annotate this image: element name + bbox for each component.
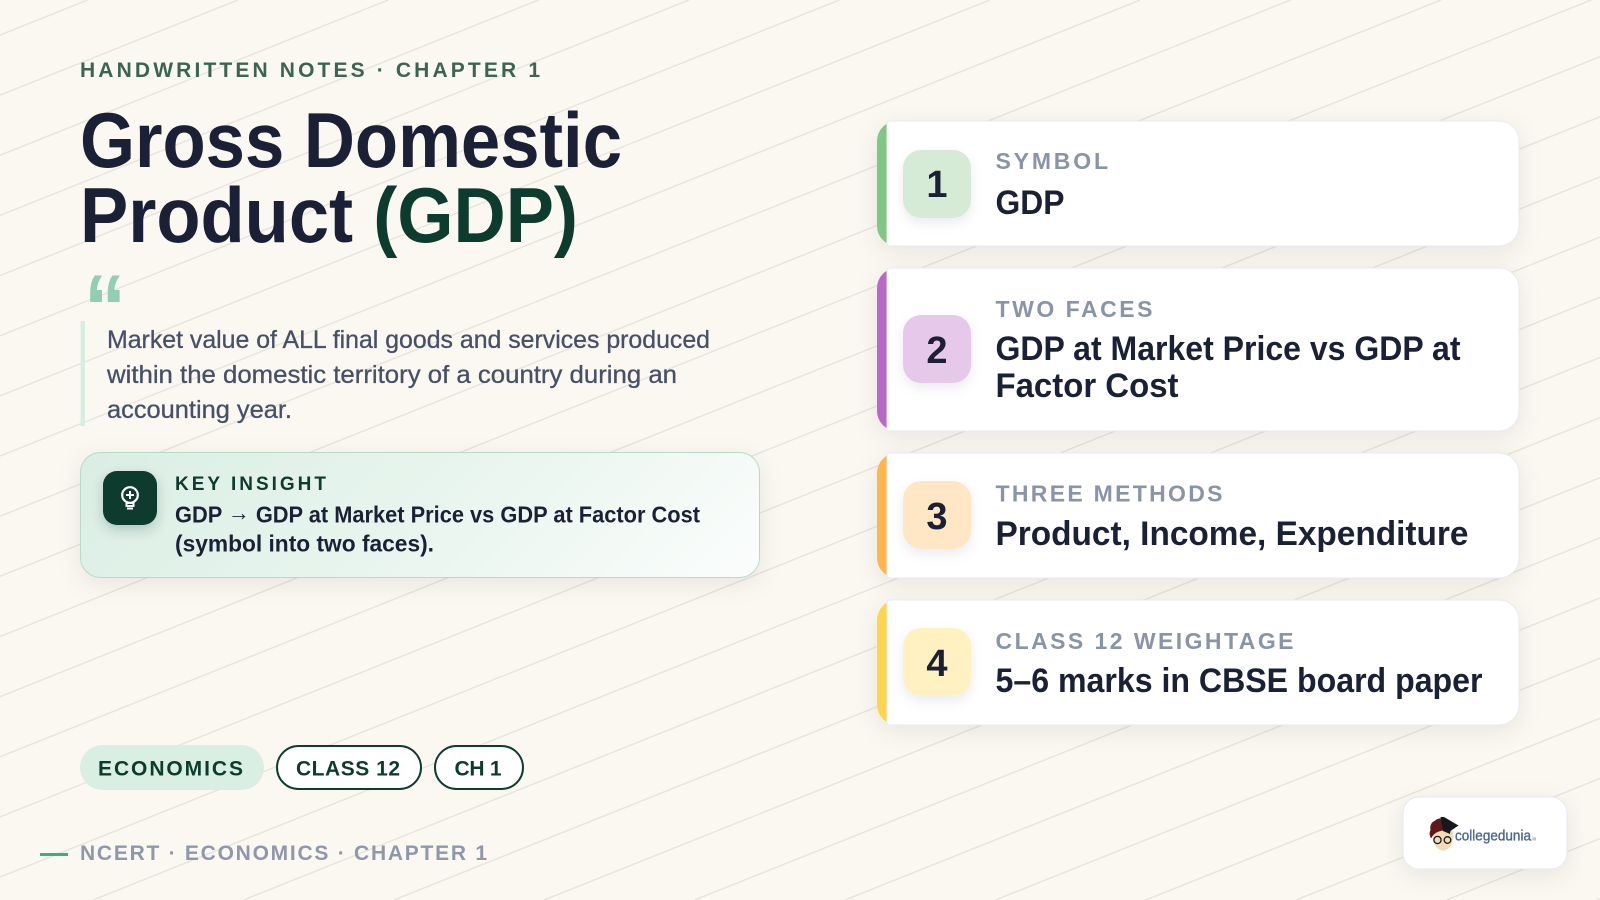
definition quote: Market value of ALL final goods and services produced [107,326,710,354]
label: CLASS 12 WEIGHTAGE [996,628,1294,654]
icon: student face [1430,817,1458,850]
label: SYMBOL [996,148,1108,174]
insight text: → [228,500,250,526]
insight text: GDP [175,502,224,528]
insight text [175,500,700,556]
tag: economics: ECONOMICS [98,758,243,780]
panel: card 3 three methods [877,453,1519,578]
tag: ch 1: CH 1 [454,758,502,780]
insight text: (symbol into two faces). [175,530,434,556]
definition quote: within the domestic territory of a country during an [106,361,677,389]
logo: collegedunia: .in [1531,836,1536,842]
insight label: KEY INSIGHT [175,474,326,495]
logo: collegedunia: collegedunia [1455,828,1532,844]
number badge 4: 4 [926,643,948,685]
value: GDP [996,184,1064,222]
panel: card 4 class 12 weightage [877,600,1519,725]
definition quote [80,321,710,426]
number badge 3 [903,481,971,549]
number badge 3: 3 [926,496,948,538]
value: Factor Cost [996,367,1178,405]
title: Product (GDP) [80,171,578,259]
number badge 2 [903,315,971,383]
title: Gross Domestic [80,96,622,184]
value: 5–6 marks in CBSE board paper [996,662,1482,700]
panel: card 1 symbol [877,121,1519,246]
quote mark: “ [84,255,126,360]
panel: card 2 two faces [877,268,1519,431]
footer: source line: NCERT · ECONOMICS · CHAPTER 1 [80,842,487,865]
tag: economics [80,745,264,790]
icon: lightbulb [103,471,157,525]
definition quote: accounting year. [107,396,292,424]
number badge 4 [903,628,971,696]
value [996,330,1460,405]
title [80,96,622,259]
tag: class 12 [277,746,421,789]
number badge 2: 2 [926,330,948,372]
panel: key insight [80,452,760,578]
number badge 1 [903,150,971,218]
logo: collegedunia [1403,797,1567,869]
insight text: GDP at Market Price vs GDP at Factor Cost [250,502,700,528]
value: Product, Income, Expenditure [996,515,1468,553]
label: THREE METHODS [996,480,1222,506]
value: GDP at Market Price vs GDP at [996,330,1460,368]
tag: ch 1 [435,746,523,789]
label: TWO FACES [996,296,1152,322]
number badge 1: 1 [926,164,948,206]
tag: class 12: CLASS 12 [296,758,400,780]
eyebrow: handwritten notes: HANDWRITTEN NOTES · CHAPTER 1 [80,59,540,82]
